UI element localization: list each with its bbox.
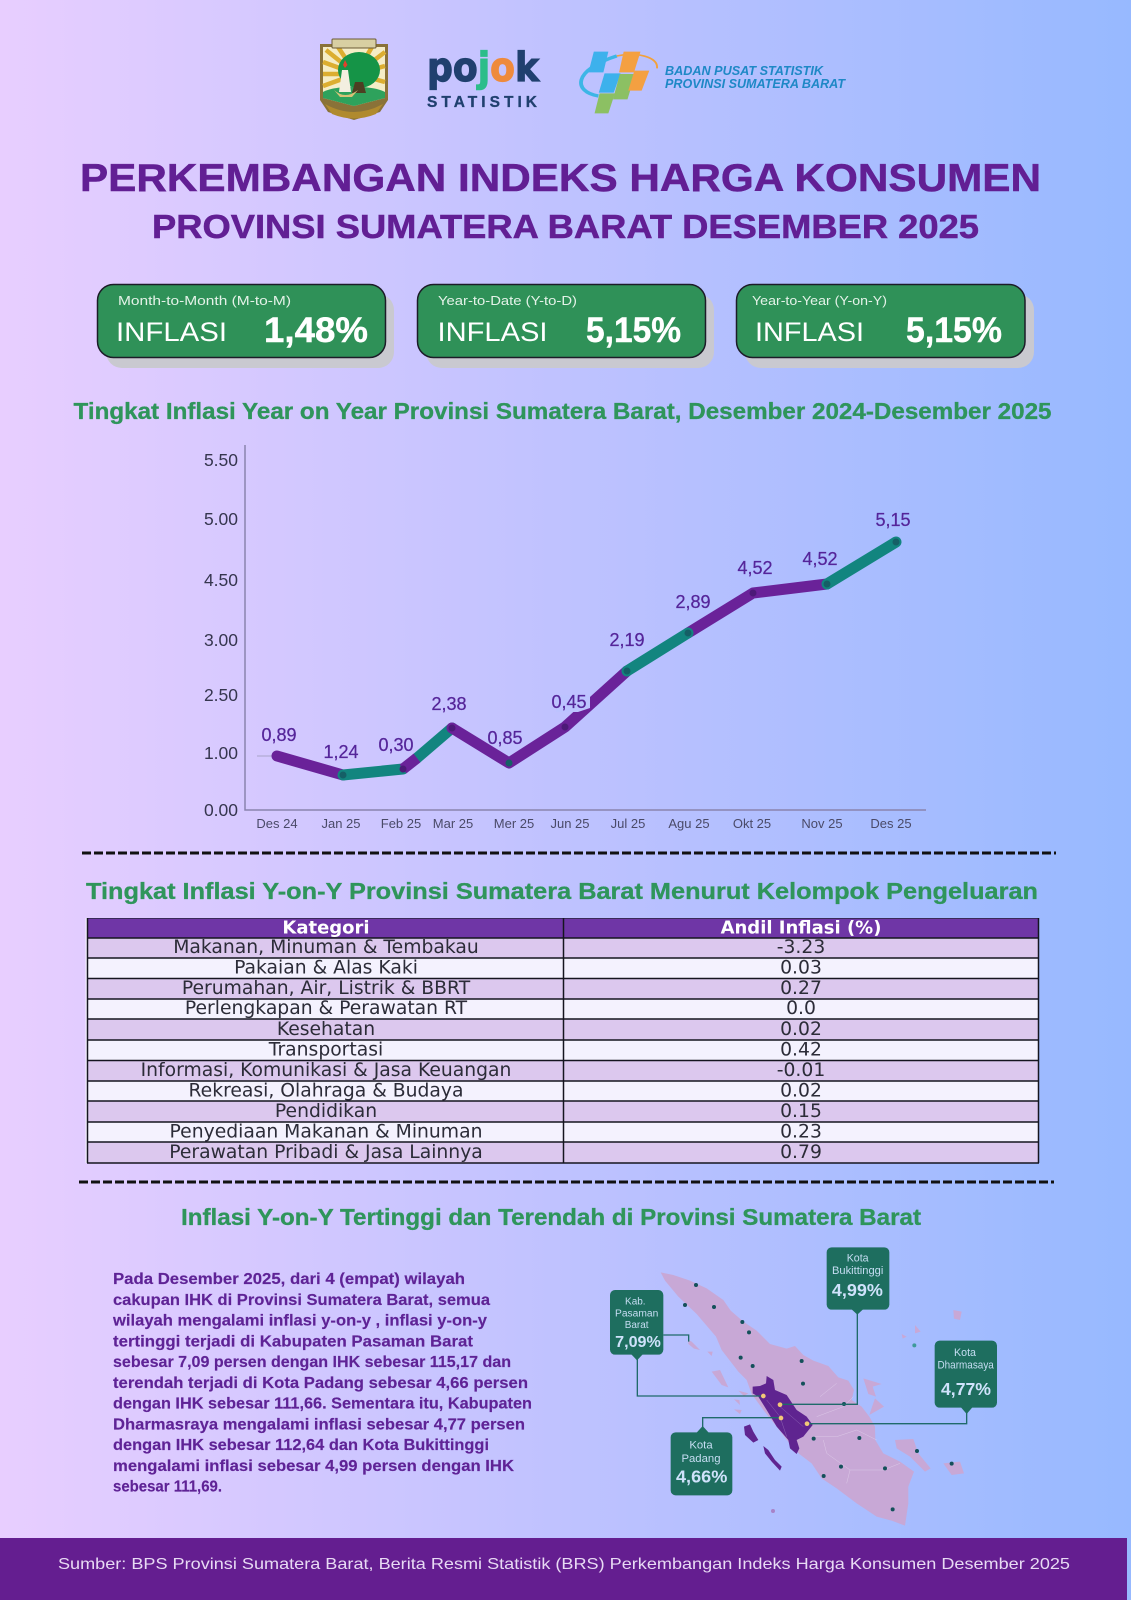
text block: explanation: tertinggi terjadi di Kabupaten Pasaman Barat bbox=[113, 1333, 473, 1350]
divider bbox=[82, 852, 1056, 854]
table: contribution by expenditure group: Pakaian & Alas Kaki bbox=[234, 958, 418, 978]
heading: highest and lowest: Inflasi Y-on-Y Tertinggi dan Terendah di Provinsi Sumatera Barat bbox=[181, 1204, 921, 1230]
data labels: 4,52 bbox=[802, 549, 838, 569]
card: year-to-year: Year-to-Year (Y-on-Y) bbox=[752, 293, 887, 308]
data labels: 0,85 bbox=[487, 728, 523, 748]
callout: Kota Padang: 4,66% bbox=[676, 1466, 727, 1486]
table: contribution by expenditure group: Perlengkapan & Perawatan RT bbox=[185, 998, 468, 1019]
text block: explanation: wilayah mengalami inflasi y-on-y , inflasi y-on-y bbox=[112, 1312, 487, 1330]
table: contribution by expenditure group: Perawatan Pribadi & Jasa Lainnya bbox=[169, 1142, 483, 1163]
title: PERKEMBANGAN INDEKS HARGA KONSUMEN bbox=[80, 157, 1041, 200]
card: month-to-month: INFLASI bbox=[116, 317, 227, 347]
callout: Kab. Pasaman Barat: 7,09% bbox=[615, 1334, 661, 1351]
text block: explanation: mengalami inflasi sebesar 4,99 persen dengan IHK bbox=[113, 1458, 515, 1475]
heading: line chart: Tingkat Inflasi Year on Year Provinsi Sumatera Barat, Desember 2024-Desember 2025 bbox=[74, 398, 1052, 424]
table: contribution by expenditure group: 0.79 bbox=[780, 1142, 822, 1163]
table header bbox=[87, 918, 1039, 938]
map: Sumatra island bbox=[661, 1272, 964, 1526]
table: contribution by expenditure group: -0.01 bbox=[777, 1060, 825, 1081]
y axis labels: 5.00 bbox=[204, 509, 238, 529]
map: region dots bbox=[683, 1283, 954, 1513]
table: contribution by expenditure group: Perumahan, Air, Listrik & BBRT bbox=[182, 978, 471, 999]
table header: Andil Inflasi (%) bbox=[721, 918, 881, 938]
y axis labels: 2.50 bbox=[204, 685, 238, 705]
y axis labels: 1.00 bbox=[204, 743, 238, 763]
table: contribution by expenditure group: Pendidikan bbox=[275, 1101, 377, 1122]
table: contribution by expenditure group: Transportasi bbox=[268, 1040, 383, 1060]
data labels: 0,45 bbox=[551, 692, 587, 712]
card: month-to-month: 1,48% bbox=[264, 311, 368, 350]
data labels: 4,52 bbox=[737, 558, 773, 578]
callout: Kota Padang bbox=[671, 1426, 732, 1495]
logo: BPS bbox=[581, 52, 846, 113]
callout: Kota Dharmasraya: Dharmasaya bbox=[937, 1359, 994, 1371]
data labels bbox=[261, 510, 911, 762]
x axis labels: Des 24 bbox=[256, 816, 298, 831]
line chart bbox=[204, 445, 926, 831]
data line bbox=[277, 542, 896, 775]
x axis labels: Mer 25 bbox=[494, 816, 534, 831]
callout: Kab. Pasaman Barat: Pasaman bbox=[615, 1308, 658, 1319]
logo: pojok statistik: pojok bbox=[427, 45, 540, 91]
x axis labels: Nov 25 bbox=[801, 816, 843, 831]
data labels: 2,19 bbox=[609, 630, 645, 650]
card: year-to-date: 5,15% bbox=[586, 311, 681, 350]
callout: Kab. Pasaman Barat: Kab. bbox=[625, 1296, 646, 1307]
table: contribution by expenditure group: Makanan, Minuman & Tembakau bbox=[173, 937, 479, 958]
callout: Kota Bukittinggi: 4,99% bbox=[832, 1280, 883, 1300]
text block: explanation: dengan IHK sebesar 111,66. Sementara itu, Kabupaten bbox=[113, 1396, 532, 1412]
x axis labels bbox=[256, 816, 912, 831]
table: contribution by expenditure group: Penyediaan Makanan & Minuman bbox=[170, 1122, 482, 1142]
x axis labels: Okt 25 bbox=[733, 816, 771, 831]
table: contribution by expenditure group: Rekreasi, Olahraga & Budaya bbox=[188, 1080, 464, 1102]
logo: BPS: BADAN PUSAT STATISTIK bbox=[665, 64, 824, 78]
callout: Kota Dharmasraya: Kota bbox=[954, 1347, 976, 1359]
text block: explanation: sebesar 7,09 persen dengan IHK sebesar 115,17 dan bbox=[113, 1354, 511, 1371]
title bbox=[80, 157, 1041, 245]
x axis labels: Jun 25 bbox=[550, 816, 590, 831]
footer: source: Sumber: BPS Provinsi Sumatera Barat, Berita Resmi Statistik (BRS) Perkembangan Indeks Harga Konsumen Desember 2025 bbox=[58, 1556, 1070, 1573]
text block: explanation: Pada Desember 2025, dari 4 (empat) wilayah bbox=[113, 1271, 465, 1288]
table: contribution by expenditure group: Kesehatan bbox=[277, 1019, 375, 1040]
y axis labels: 3.00 bbox=[204, 630, 238, 650]
table header: Kategori bbox=[282, 918, 370, 938]
card: month-to-month: Month-to-Month (M-to-M) bbox=[118, 293, 291, 308]
card: year-to-date bbox=[418, 284, 714, 368]
x axis labels: Jan 25 bbox=[321, 816, 361, 831]
y axis labels: 4.50 bbox=[204, 570, 238, 590]
card: year-to-year bbox=[736, 284, 1034, 368]
text block: explanation bbox=[112, 1271, 532, 1496]
data labels: 1,24 bbox=[323, 742, 359, 762]
table: contribution by expenditure group: 0.23 bbox=[780, 1122, 822, 1142]
footer: source bbox=[0, 1538, 1127, 1600]
callout: Kab. Pasaman Barat: Barat bbox=[625, 1320, 649, 1331]
card: year-to-date: INFLASI bbox=[438, 317, 548, 347]
callout: Kota Bukittinggi bbox=[827, 1247, 889, 1315]
card: year-to-date: Year-to-Date (Y-to-D) bbox=[438, 293, 577, 308]
data labels: 5,15 bbox=[875, 510, 911, 530]
table: contribution by expenditure group: 0.27 bbox=[780, 978, 822, 999]
card: month-to-month bbox=[98, 284, 394, 368]
card: year-to-year: 5,15% bbox=[906, 311, 1002, 350]
table: contribution by expenditure group: -3.23 bbox=[777, 937, 825, 958]
callout: Kota Bukittinggi: Bukittinggi bbox=[832, 1265, 883, 1277]
x axis labels: Des 25 bbox=[870, 816, 912, 831]
text block: explanation: dengan IHK sebesar 112,64 dan Kota Bukittinggi bbox=[113, 1437, 489, 1454]
map: highlighted region dots bbox=[761, 1394, 809, 1426]
data labels: 2,38 bbox=[431, 694, 467, 714]
callout: Kota Padang: Kota bbox=[689, 1439, 713, 1451]
map: West Sumatra highlighted bbox=[744, 1376, 813, 1471]
text block: explanation: sebesar 111,69. bbox=[113, 1478, 222, 1496]
table: contribution by expenditure group: Informasi, Komunikasi & Jasa Keuangan bbox=[141, 1060, 511, 1081]
x axis labels: Jul 25 bbox=[611, 816, 645, 831]
table: contribution by expenditure group: 0.02 bbox=[780, 1019, 822, 1040]
text block: explanation: cakupan IHK di Provinsi Sumatera Barat, semua bbox=[113, 1292, 490, 1309]
callout: Kab. Pasaman Barat bbox=[610, 1290, 663, 1360]
callout: Kota Dharmasraya bbox=[935, 1341, 997, 1414]
data labels: 0,89 bbox=[261, 725, 297, 745]
data markers bbox=[340, 538, 900, 778]
table: contribution by expenditure group bbox=[86, 918, 1039, 1163]
leader lines bbox=[637, 1310, 967, 1432]
y axis labels: 0.00 bbox=[204, 800, 238, 820]
y axis labels: 5.50 bbox=[204, 450, 238, 470]
x axis labels: Feb 25 bbox=[381, 816, 421, 831]
callout: Kota Padang: Padang bbox=[681, 1453, 721, 1465]
logo: BPS: PROVINSI SUMATERA BARAT bbox=[665, 77, 846, 91]
x axis labels: Agu 25 bbox=[668, 816, 710, 831]
logo: coat of arms of West Sumatra bbox=[320, 39, 388, 120]
card: year-to-year: INFLASI bbox=[755, 317, 864, 347]
table: contribution by expenditure group: 0.0 bbox=[786, 998, 816, 1019]
text block: explanation: Dharmasraya mengalami inflasi sebesar 4,77 persen bbox=[113, 1416, 525, 1433]
table: contribution by expenditure group: 0.42 bbox=[780, 1040, 822, 1060]
table: contribution by expenditure group: 0.02 bbox=[780, 1080, 822, 1102]
logo: pojok statistik: STATISTIK bbox=[427, 94, 538, 111]
logo: pojok statistik bbox=[427, 45, 540, 111]
divider bbox=[79, 1180, 1054, 1184]
data labels: 0,30 bbox=[378, 735, 414, 755]
y axis labels bbox=[204, 450, 238, 820]
map of Sumatra with callouts bbox=[610, 1247, 997, 1526]
heading: table: Tingkat Inflasi Y-on-Y Provinsi Sumatera Barat Menurut Kelompok Pengeluaran bbox=[86, 878, 1038, 904]
data labels: 2,89 bbox=[675, 592, 711, 612]
table: contribution by expenditure group: 0.03 bbox=[780, 958, 822, 978]
title: PROVINSI SUMATERA BARAT DESEMBER 2025 bbox=[152, 208, 979, 245]
callout: Kota Bukittinggi: Kota bbox=[847, 1253, 869, 1265]
table: contribution by expenditure group: 0.15 bbox=[780, 1101, 822, 1122]
text block: explanation: terendah terjadi di Kota Padang sebesar 4,66 persen bbox=[113, 1375, 528, 1392]
x axis labels: Mar 25 bbox=[433, 816, 473, 831]
callout: Kota Dharmasraya: 4,77% bbox=[941, 1379, 991, 1399]
